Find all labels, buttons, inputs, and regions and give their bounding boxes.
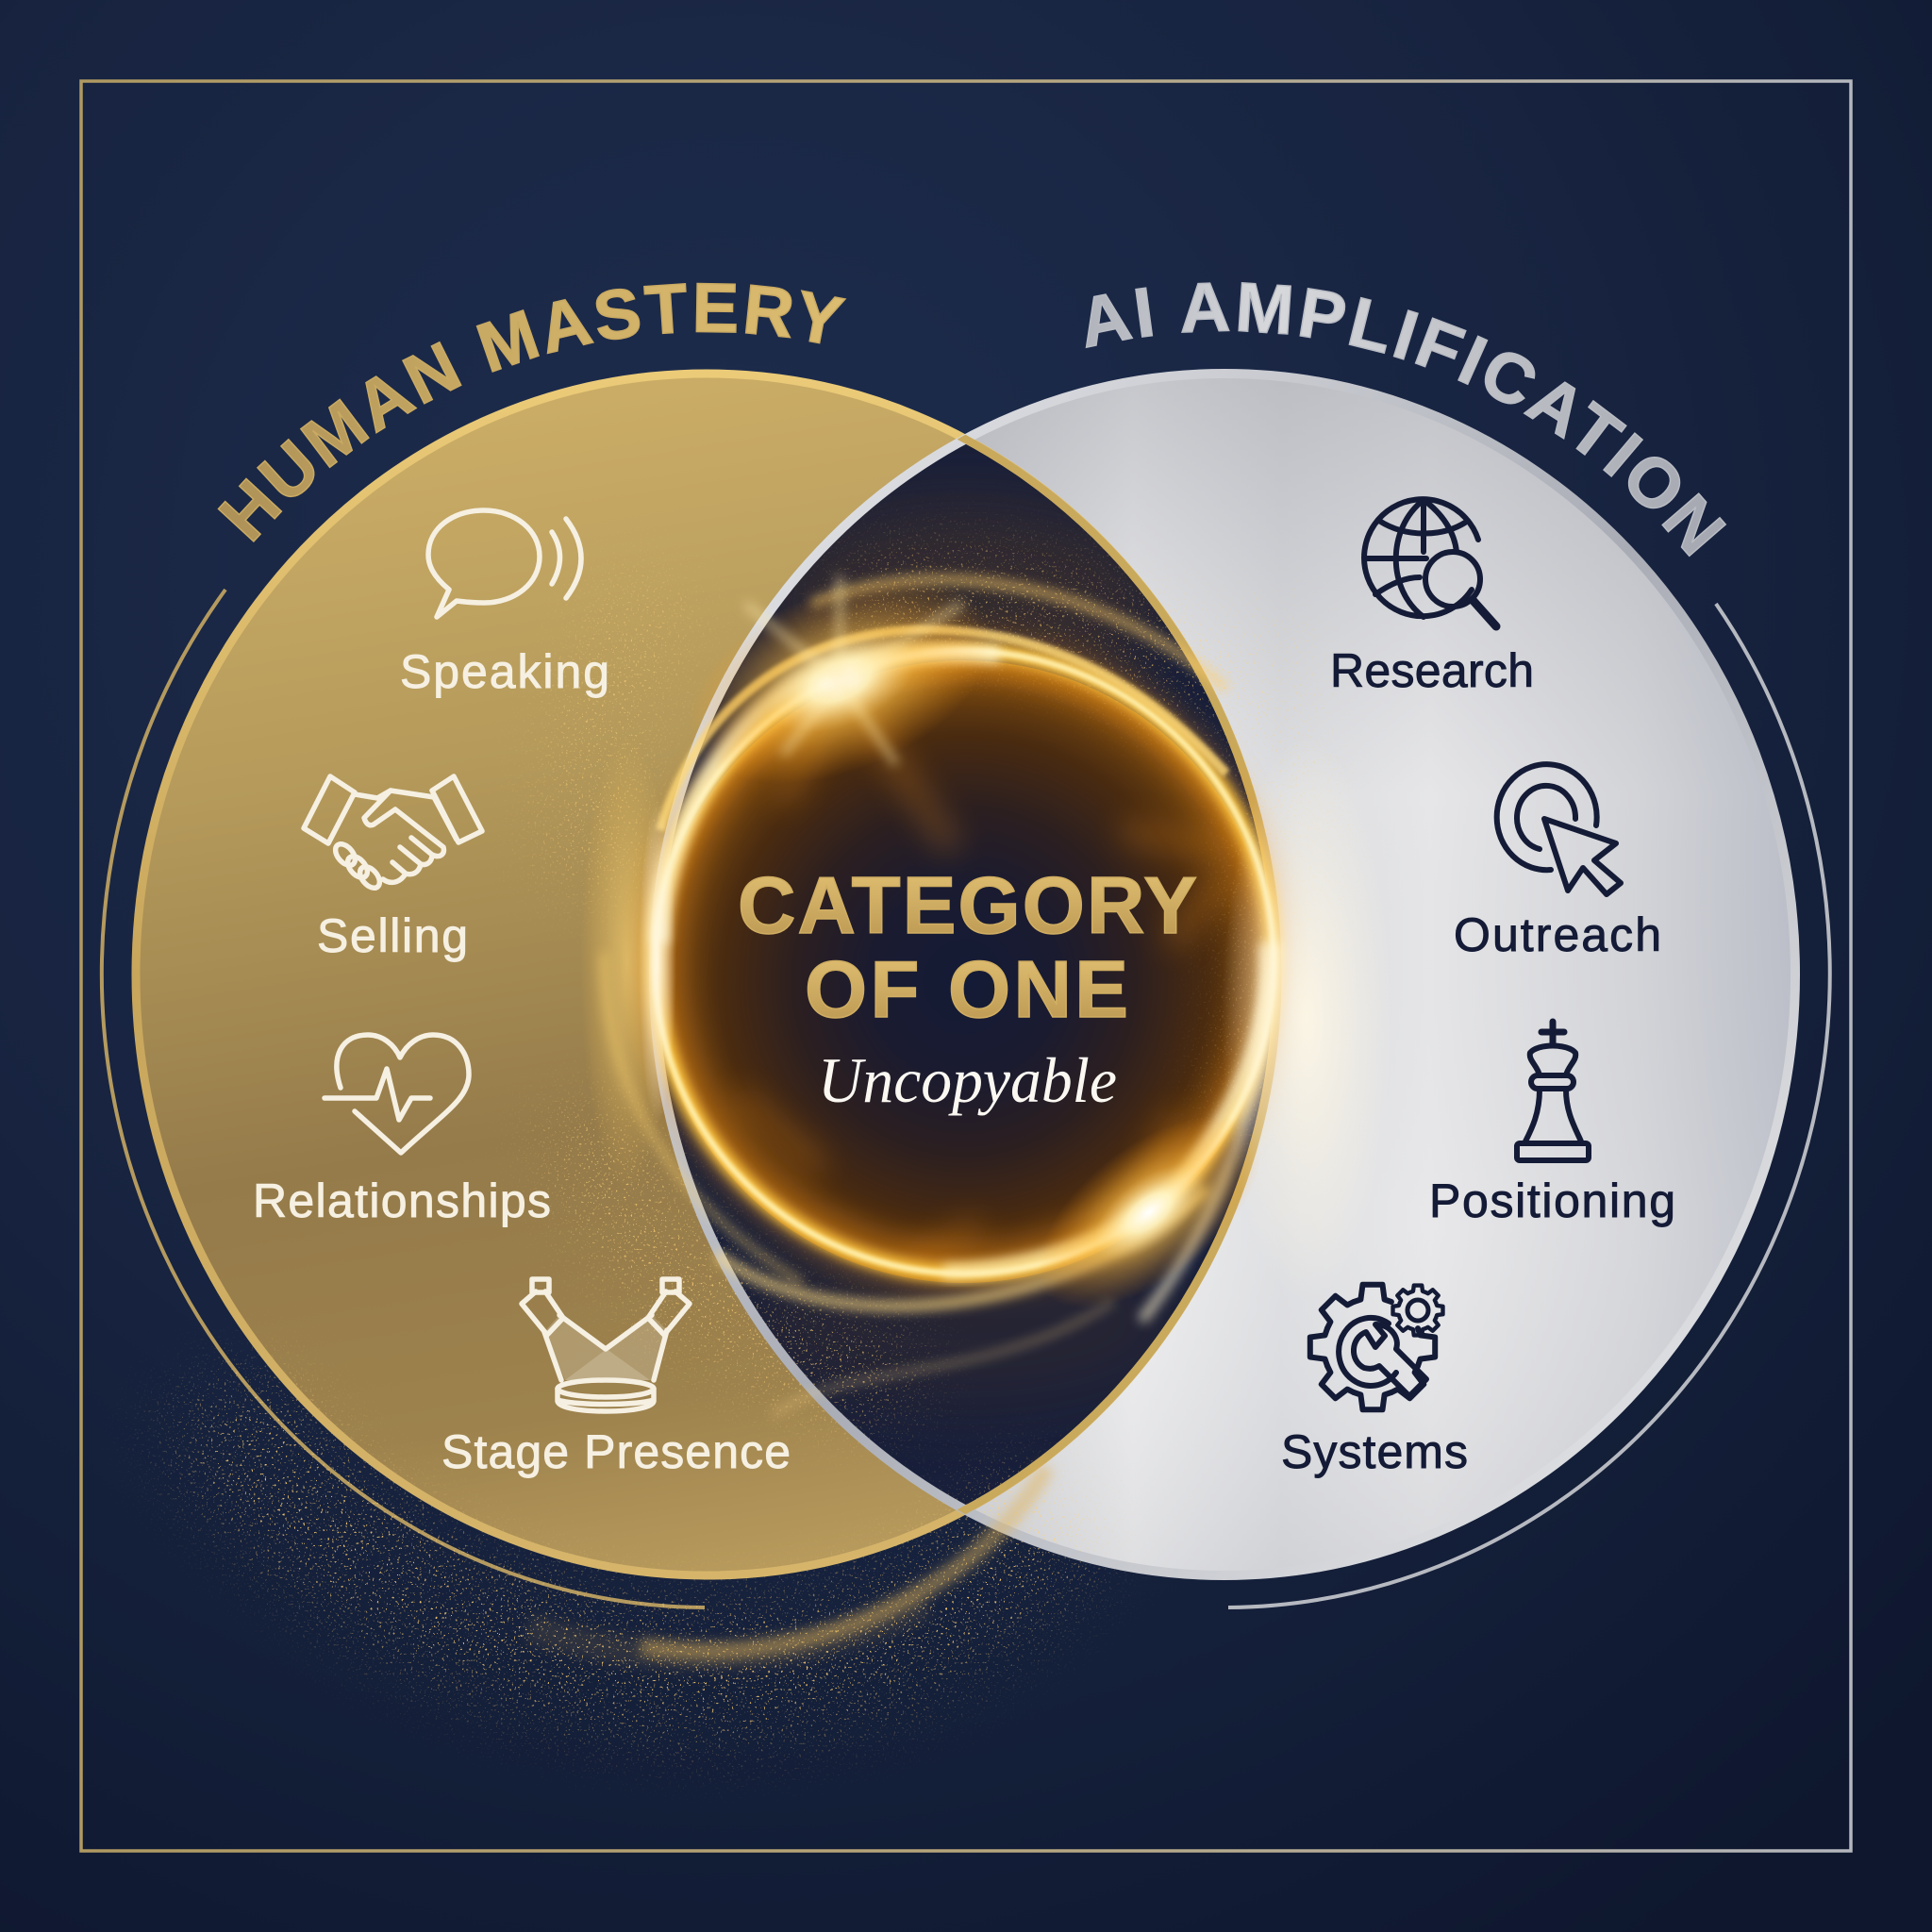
icon: chess king <box>1517 1022 1589 1160</box>
outer arc: right <box>1228 604 1830 1607</box>
bottom swirl <box>528 1467 1047 1657</box>
center title: OF ONE <box>805 945 1128 1035</box>
label: research: Research <box>1330 644 1534 697</box>
label: speaking: Speaking <box>400 645 609 698</box>
label: stage presence: Stage Presence <box>441 1425 791 1478</box>
circle: ai amplification <box>654 374 1795 1575</box>
item: speaking <box>400 510 609 698</box>
item: relationships <box>253 1035 551 1227</box>
item: positioning <box>1429 1022 1675 1227</box>
icon: spotlights and stage <box>522 1279 690 1411</box>
flare: upper left <box>658 538 1022 824</box>
glowing ring <box>604 579 1274 1415</box>
heading: ai amplification: AI AMPLIFICATION <box>1085 282 1726 557</box>
label: outreach: Outreach <box>1454 908 1661 961</box>
circle rim: gold <box>136 374 1277 1575</box>
gold dust particles <box>121 504 1364 1795</box>
label: relationships: Relationships <box>253 1174 551 1227</box>
outer arc: left <box>102 590 705 1607</box>
item: stage presence <box>441 1279 791 1478</box>
icon: speech bubble <box>428 510 581 617</box>
label: systems: Systems <box>1281 1425 1468 1478</box>
flare: lower right <box>1005 1079 1293 1345</box>
icon: heart with pulse <box>325 1035 469 1153</box>
label: selling: Selling <box>317 909 468 962</box>
glow on silver side <box>1222 736 1391 1302</box>
circle: human mastery <box>136 374 1277 1575</box>
item: outreach <box>1454 764 1661 961</box>
center title: CATEGORY <box>738 861 1197 951</box>
item: research <box>1330 499 1534 697</box>
label: positioning: Positioning <box>1429 1174 1675 1227</box>
icon: target and cursor <box>1497 764 1621 894</box>
center title <box>738 861 1197 1035</box>
icon: globe and magnifier <box>1364 499 1496 626</box>
overlap lens <box>660 444 1270 1506</box>
heading: human mastery: HUMAN MASTERY <box>217 283 847 542</box>
icon: gears and wrench <box>1310 1285 1442 1409</box>
item: selling <box>304 776 482 962</box>
warm glow outside left of lens <box>580 736 675 1189</box>
glow on left lens edge <box>639 802 676 1123</box>
rim segment: gold on silver side <box>957 434 1267 1515</box>
icon: handshake <box>304 776 482 891</box>
center subtitle: Uncopyable <box>818 1044 1117 1116</box>
circle rim: silver <box>654 374 1795 1575</box>
item: systems <box>1281 1285 1468 1478</box>
